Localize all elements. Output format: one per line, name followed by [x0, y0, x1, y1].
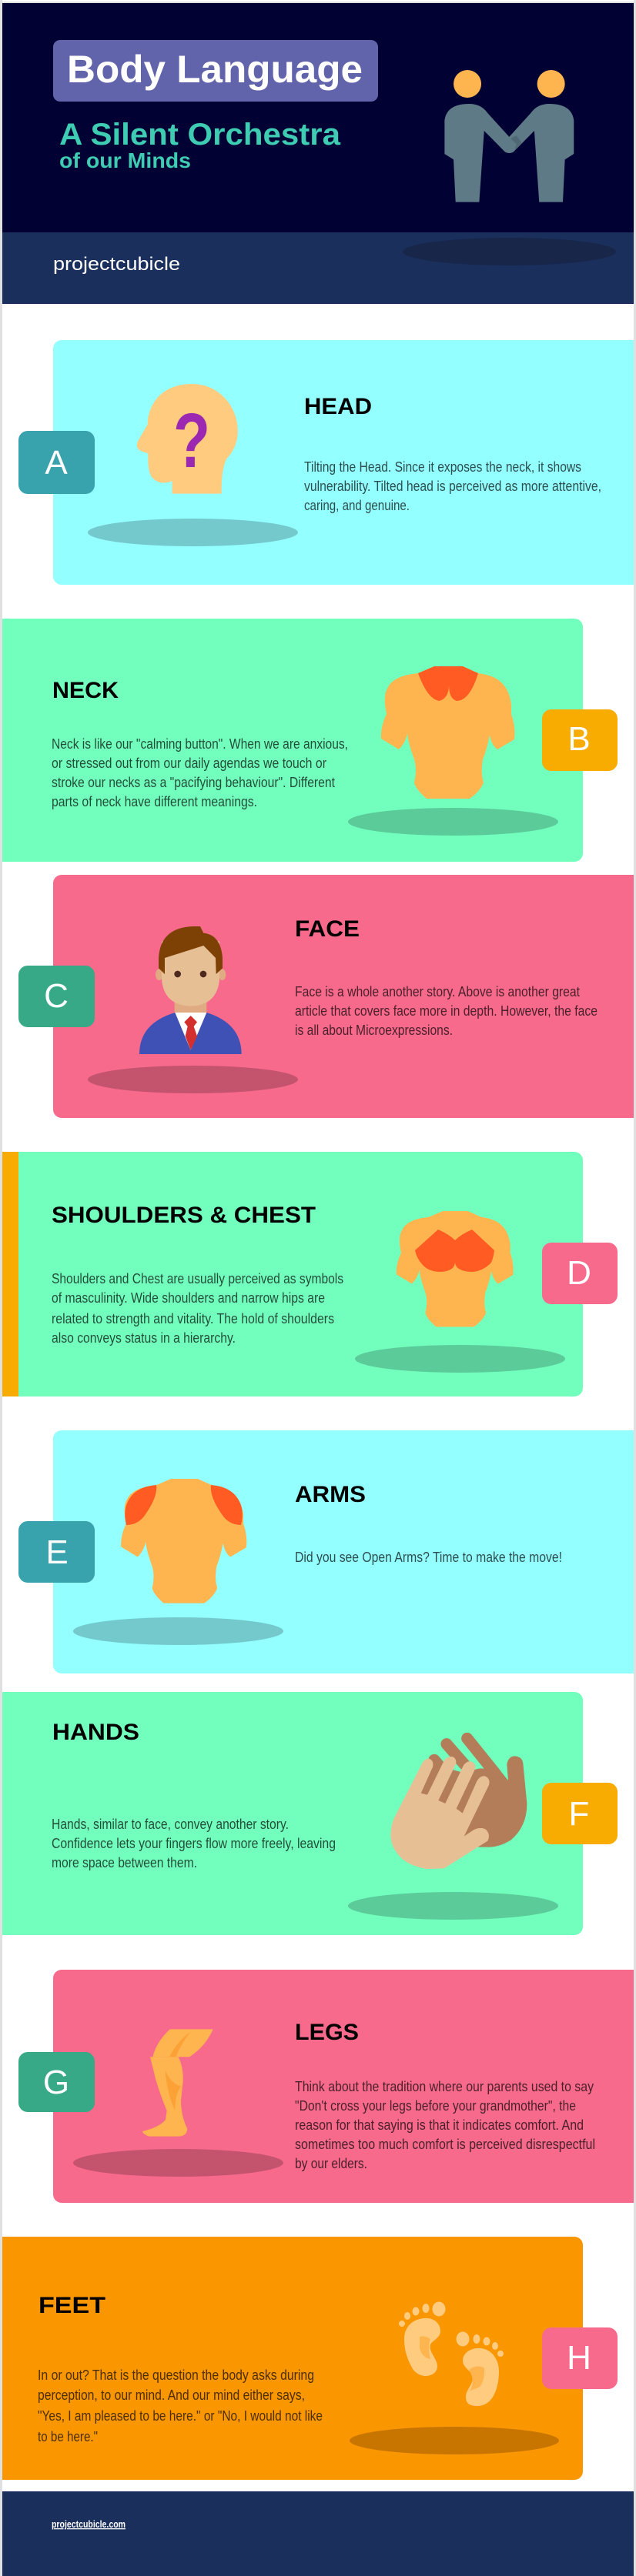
shadow	[350, 2427, 559, 2454]
text block: perception, to our mind. And our mind either says,	[38, 2387, 305, 2403]
subtitle: A Silent Orchestra	[59, 118, 341, 152]
text block: more space between them.	[52, 1855, 197, 1870]
panel: hands	[0, 1692, 618, 1935]
heading: NECK	[52, 678, 119, 703]
footer	[2, 2491, 634, 2576]
icon: torso with neck highlighted	[381, 666, 514, 799]
shadow	[355, 1345, 565, 1373]
text block: also conveys status in a hierarchy.	[52, 1330, 236, 1346]
shadow	[73, 1617, 283, 1645]
badge C	[18, 966, 95, 1027]
heading: FACE	[295, 916, 360, 942]
heading: HANDS	[52, 1720, 139, 1745]
badge C: C	[44, 977, 69, 1015]
text block: sometimes too much comfort is perceived disrespectful	[295, 2137, 595, 2152]
shadow	[88, 1066, 298, 1093]
text block: article that covers face more in depth. However, the face	[295, 1003, 598, 1019]
icon: footprints	[399, 2302, 504, 2406]
text block: or stressed out from our daily agendas we touch or	[52, 756, 326, 771]
text block: caring, and genuine.	[304, 498, 410, 513]
icon: man in suit	[139, 926, 242, 1054]
text block	[304, 459, 601, 513]
text block: Hands, similar to face, convey another story.	[52, 1817, 289, 1832]
text block: related to strength and vitality. The hold of shoulders	[52, 1311, 334, 1326]
panel: feet	[0, 2237, 618, 2480]
shadow	[88, 519, 298, 546]
panel: shoulders and chest	[0, 1152, 618, 1396]
badge D: D	[567, 1254, 591, 1292]
text block: is all about Microexpressions.	[295, 1023, 453, 1038]
icon shadow	[403, 238, 616, 265]
badge H: H	[567, 2339, 591, 2377]
text block: to be here."	[38, 2429, 98, 2444]
badge D	[542, 1243, 618, 1304]
icon: clapping hands	[390, 1734, 527, 1869]
subtitle	[59, 118, 341, 172]
text block	[52, 736, 348, 809]
text block: Think about the tradition where our parents used to say	[295, 2079, 594, 2094]
text block: Shoulders and Chest are usually perceived as symbols	[52, 1271, 343, 1286]
badge B: B	[567, 720, 591, 758]
text block: by our elders.	[295, 2156, 367, 2171]
badge H	[542, 2327, 618, 2389]
icon: head with question mark: ?	[173, 398, 210, 484]
heading: FEET	[38, 2293, 105, 2318]
panel: head	[18, 340, 636, 585]
text block: Face is a whole another story. Above is another great	[295, 984, 580, 999]
text block: parts of neck have different meanings.	[52, 794, 257, 809]
text block: Tilting the Head. Since it exposes the neck, it shows	[304, 459, 581, 475]
panel: face	[18, 875, 636, 1118]
text block: vulnerability. Tilted head is perceived as more attentive,	[304, 479, 601, 494]
text block: stroke our necks as a "pacifying behaviour". Different	[52, 775, 335, 790]
badge E: E	[45, 1533, 69, 1571]
text block	[52, 1817, 336, 1870]
text block	[295, 984, 598, 1038]
heading: LEGS	[295, 2020, 359, 2045]
badge F: F	[569, 1795, 589, 1833]
text block: "Don't cross your legs before your grandmother", the	[295, 2098, 576, 2114]
shadow	[73, 2149, 283, 2177]
heading: SHOULDERS & CHEST	[52, 1203, 316, 1228]
footer link: projectcubicle.com	[52, 2518, 126, 2530]
text block: "Yes, I am pleased to be here." or "No, I would not like	[38, 2408, 323, 2424]
badge F	[542, 1783, 618, 1844]
text block: Did you see Open Arms? Time to make the move!	[295, 1550, 562, 1565]
panel: legs	[18, 1970, 636, 2203]
icon: head with question mark	[137, 384, 238, 494]
text block	[52, 1271, 343, 1346]
heading: HEAD	[304, 394, 372, 419]
panel: arms	[18, 1430, 636, 1673]
badge G	[18, 2052, 95, 2112]
badge B	[542, 709, 618, 771]
title	[53, 40, 378, 102]
shadow	[348, 1892, 558, 1920]
title: Body Language	[67, 48, 363, 91]
shadow	[348, 808, 558, 836]
icon: torso with chest highlighted	[397, 1211, 514, 1326]
text block: of masculinity. Wide shoulders and narrow hips are	[52, 1290, 325, 1306]
icon: handshake	[444, 70, 574, 202]
text block	[38, 2367, 323, 2444]
panel: neck	[0, 619, 618, 862]
text block: reason for that saying is that it indicates comfort. And	[295, 2117, 584, 2133]
badge E	[18, 1521, 95, 1583]
icon: torso with arms highlighted	[121, 1479, 246, 1603]
badge A: A	[45, 444, 68, 482]
header panel	[2, 3, 634, 304]
text block	[295, 2079, 595, 2171]
badge G: G	[43, 2064, 69, 2101]
badge A	[18, 431, 95, 494]
subtitle: of our Minds	[59, 148, 191, 172]
text block: Confidence lets your fingers flow more freely, leaving	[52, 1836, 336, 1851]
icon: leg	[142, 2029, 213, 2137]
text block: In or out? That is the question the body asks during	[38, 2367, 314, 2383]
heading: ARMS	[295, 1482, 366, 1507]
text block: Neck is like our "calming button". When we are anxious,	[52, 736, 348, 752]
brand name: projectcubicle	[53, 254, 180, 275]
